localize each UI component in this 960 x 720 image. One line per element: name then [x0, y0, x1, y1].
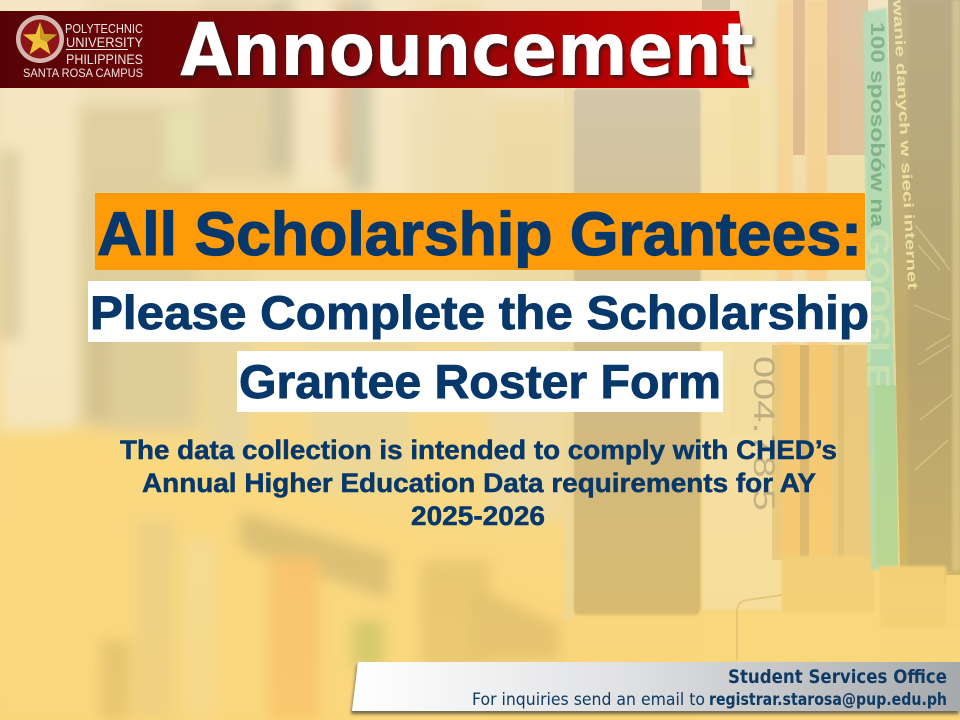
dark right-hand book: [888, 0, 960, 590]
university name: SANTA ROSA CAMPUS: [23, 66, 143, 80]
subheading line 1: Please Complete the Scholarship: [90, 286, 869, 339]
book spine lettering: 100 sposobów na: [866, 22, 887, 228]
announcement banner: [0, 8, 754, 93]
large grey book: [573, 88, 701, 615]
green spine book: [863, 8, 898, 570]
book base blocks: [782, 556, 874, 612]
banner ribbon: [0, 11, 749, 88]
subheading line 2: Grantee Roster Form: [239, 355, 721, 408]
headline: All Scholarship Grantees: All Scholarship Grantees:: [97, 200, 862, 268]
university logo: [16, 15, 64, 63]
inquiry line: [472, 690, 947, 709]
book spine lettering: GOOGLE: [860, 228, 896, 388]
university name: PHILIPPINES: [66, 51, 143, 67]
lower orange spines: [772, 345, 877, 560]
pale white-spine book: [702, 85, 782, 615]
blurred books on the left: [0, 0, 565, 720]
description text: The data collection is intended to comply with CHED’s: [120, 435, 837, 465]
description text: 2025-2026: [411, 501, 545, 531]
university name: POLYTECHNIC: [65, 22, 143, 36]
book spine lettering: 004.78 5: [747, 356, 780, 511]
book spine lettering: wanie danych w sieci internet: [890, 0, 921, 290]
footer: contact panel: [352, 662, 960, 711]
university name: UNIVERSITY: [66, 35, 143, 50]
shelf edge curve: [737, 595, 782, 660]
inquiry line: For inquiries send an email to: [472, 690, 705, 709]
description text: Annual Higher Education Data requirements for AY: [142, 468, 816, 498]
university name: [23, 22, 143, 80]
description text: [120, 435, 837, 531]
book spine lettering: [747, 0, 921, 511]
heading: Announcement: Announcement: [180, 8, 754, 93]
upper book spines: [772, 0, 867, 350]
